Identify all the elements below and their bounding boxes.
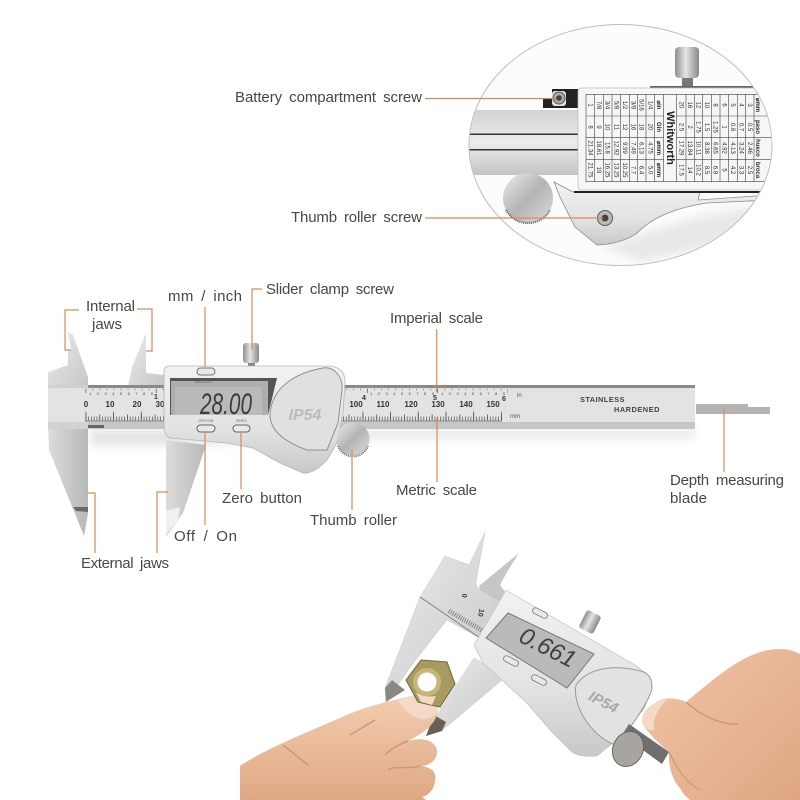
Whitworth thread table text: 7/8	[595, 101, 601, 110]
label: internal jaws: jaws	[91, 316, 122, 333]
Whitworth thread table text: Gin	[655, 122, 661, 132]
Whitworth thread table text: 20	[646, 124, 652, 131]
Whitworth thread table text: 10	[703, 102, 709, 109]
dark gap under plate	[574, 191, 770, 193]
metric numerals: 0	[84, 400, 89, 409]
beam scale on photo	[420, 593, 484, 640]
Whitworth thread table text: 14	[686, 167, 692, 174]
HARDENED text: HARDENED	[614, 405, 660, 414]
Whitworth thread table text: 10.2	[694, 164, 700, 176]
Whitworth thread table text: 11	[612, 124, 618, 131]
Whitworth thread table text: 2	[686, 125, 692, 129]
jaw tip	[385, 680, 405, 702]
Whitworth thread table text: 18.61	[595, 140, 601, 156]
fixed internal jaw	[48, 332, 88, 388]
Whitworth thread table text: 19	[595, 167, 601, 174]
STAINLESS text: STAINLESS	[580, 395, 625, 404]
Whitworth thread table text: 0.5	[746, 123, 752, 132]
Whitworth thread table text: 6.4	[638, 166, 644, 175]
metric numerals	[84, 400, 500, 409]
inset beam	[465, 110, 580, 175]
metric numerals: 110	[377, 400, 390, 409]
panel: inset close-up of battery and thumb roller screws	[465, 24, 775, 266]
fixed external jaw	[48, 422, 88, 536]
Whitworth thread table text: 18	[638, 124, 644, 131]
metric scale ticks	[85, 416, 502, 421]
Whitworth thread table text: 1.25	[712, 121, 718, 133]
Whitworth thread table text: 1.5	[703, 123, 709, 132]
teardrop IP54 badge	[270, 368, 342, 450]
Whitworth thread table text: 1	[720, 125, 726, 129]
Whitworth thread table text: ⌀in	[655, 101, 661, 110]
metric numerals: 10	[106, 400, 115, 409]
movable internal jaw	[128, 333, 166, 386]
Whitworth thread table text: 16	[686, 102, 692, 109]
Whitworth thread table text: 6.13	[638, 142, 644, 154]
leader: thumb roller screw	[425, 217, 603, 219]
photo clamp knob	[578, 609, 602, 635]
metric numerals: 100	[349, 400, 363, 409]
Whitworth thread table text: 1/4	[646, 101, 652, 110]
imperial inch numerals: 6	[502, 396, 506, 403]
Whitworth thread table text: 0.8	[729, 123, 735, 132]
panel: hands measuring a nut with the caliper	[240, 532, 800, 800]
Whitworth thread table text: 3/8	[629, 101, 635, 110]
Whitworth thread table text: 12.92	[612, 140, 618, 156]
Whitworth thread table text: Whitworth	[664, 111, 676, 165]
Whitworth thread table text: 13.25	[612, 162, 618, 178]
teardrop IP54 badge: IP54	[289, 407, 322, 424]
mm/inch button: MM/INCH	[194, 379, 212, 384]
inset black bracket	[543, 89, 578, 108]
Whitworth thread table text: 12	[694, 102, 700, 109]
label: thumb roller screw: Thumb roller screw	[291, 209, 422, 226]
photo buttons	[503, 607, 548, 686]
Whitworth thread table text: 5	[729, 103, 735, 107]
imperial inch numerals: 5	[433, 395, 437, 402]
label: off / on: Off / On	[174, 528, 237, 545]
Whitworth thread table text: 7.49	[629, 142, 635, 154]
Whitworth thread table text: 3/4	[604, 101, 610, 110]
Whitworth thread table text: 12	[621, 124, 627, 131]
Whitworth thread table text: 4	[738, 103, 744, 107]
Whitworth thread table text: 6.8	[712, 166, 718, 175]
metric numerals: 150	[486, 400, 500, 409]
caliper shadow	[90, 430, 695, 445]
Whitworth thread table text: 1.75	[694, 121, 700, 133]
label: thumb roller: Thumb roller	[310, 512, 397, 529]
Whitworth thread table text: 16.25	[604, 162, 610, 178]
off/on button: OFF/ON	[198, 418, 214, 423]
label: mm / inch: mm / inch	[168, 288, 242, 305]
Whitworth thread table text: 10.11	[694, 141, 700, 156]
unit marks	[510, 393, 522, 420]
Whitworth thread table text: 6.65	[712, 142, 718, 154]
Whitworth thread table text: 4.92	[720, 142, 726, 154]
Whitworth thread table text: 8.38	[703, 142, 709, 154]
inset thumb roller screw	[598, 210, 612, 226]
thumb roller	[336, 422, 370, 456]
imperial inch numerals: 4	[362, 395, 366, 402]
inset battery screw	[552, 91, 566, 106]
LCD reading: 28.00	[199, 388, 252, 421]
depth measuring blade	[696, 404, 770, 414]
Whitworth thread table text: 3.24	[738, 142, 744, 154]
label: depth measuring blade	[670, 472, 784, 507]
label: zero button: Zero button	[222, 490, 302, 507]
zero button	[233, 418, 250, 432]
inset clamp knob	[675, 47, 699, 89]
hex nut	[406, 660, 455, 707]
label: external jaws: External jaws	[81, 555, 169, 572]
unit marks: mm	[510, 414, 520, 420]
label: depth measuring blade: blade	[670, 490, 707, 507]
metric numerals: 30	[156, 400, 165, 409]
Whitworth thread table text: ⌀mm	[655, 163, 661, 177]
Whitworth thread table text: 8	[586, 125, 592, 129]
inset body shadow	[608, 206, 750, 262]
LCD screen	[171, 381, 268, 415]
metric numerals: 120	[404, 400, 418, 409]
fixed jaw head	[385, 532, 504, 702]
metric numerals: 140	[459, 400, 473, 409]
label: internal jaws	[86, 298, 135, 333]
label: imperial scale: Imperial scale	[390, 310, 483, 327]
Whitworth thread table text: 15.8	[604, 142, 610, 154]
Whitworth thread table text: 6	[720, 103, 726, 107]
movable upper jaw	[479, 553, 519, 604]
Whitworth thread table text: 16	[629, 124, 635, 131]
Whitworth thread table text: paso	[754, 120, 760, 134]
Whitworth thread table text: 1	[586, 103, 592, 107]
imperial scale tenths numerals: 1 2 3 4 5 6 7 8 9	[441, 391, 506, 396]
Whitworth reference plate	[578, 88, 775, 190]
beam	[48, 385, 695, 429]
photo body	[474, 590, 652, 756]
Whitworth thread table text: 3	[746, 103, 752, 107]
label: depth measuring blade: Depth measuring	[670, 472, 784, 489]
movable lower jaw	[426, 657, 506, 736]
photo beam end	[622, 724, 669, 764]
Whitworth thread table text: 5.0	[646, 166, 652, 175]
label: slider clamp screw: Slider clamp screw	[266, 281, 394, 298]
Whitworth thread table text: 0.7	[738, 123, 744, 132]
Whitworth thread table text: 9	[595, 125, 601, 129]
imperial scale tenths numerals: 1 2 3 4 5 6 7 8 9	[89, 391, 154, 396]
zero button: ZERO	[235, 418, 247, 423]
Whitworth thread table text: 5	[720, 168, 726, 172]
main caliper illustration	[48, 332, 770, 537]
imperial inch numerals	[154, 394, 506, 403]
Whitworth thread table text: 17.5	[677, 164, 683, 176]
photo LCD reading: 0.661	[515, 622, 580, 674]
Whitworth thread table text: 2.46	[746, 142, 752, 154]
imperial scale ticks	[86, 390, 508, 391]
metric numerals: 20	[133, 400, 142, 409]
leaders for main caliper	[65, 289, 724, 553]
metric numerals: 130	[431, 400, 445, 409]
Whitworth thread table text: 4.75	[646, 142, 652, 154]
Whitworth thread table text: 17.29	[677, 140, 683, 156]
Whitworth thread table text: hueco	[754, 139, 760, 157]
photo thumb roller	[607, 726, 649, 772]
Whitworth thread table text: 8	[712, 103, 718, 107]
slider body	[164, 366, 345, 473]
off/on button	[197, 418, 215, 432]
Whitworth thread table text: broca	[754, 162, 760, 179]
label: metric scale: Metric scale	[396, 482, 477, 499]
movable external jaw	[166, 440, 206, 537]
imperial inch numerals: 1	[154, 394, 158, 401]
leader: battery compartment screw	[425, 98, 556, 100]
Whitworth thread table text: 10.25	[621, 162, 627, 178]
Whitworth thread table text: ⌀mm	[754, 98, 760, 112]
beam scale on photo: 0	[460, 593, 467, 598]
Whitworth thread table text: 7.7	[629, 166, 635, 175]
Whitworth thread table text: 4.2	[729, 166, 735, 175]
Whitworth thread table text: 1/2	[621, 101, 627, 110]
Whitworth thread table text: 5/8	[612, 101, 618, 110]
Whitworth thread table text: 20	[677, 102, 683, 109]
Whitworth thread table text: 8.5	[703, 166, 709, 175]
Whitworth thread table text	[586, 98, 760, 179]
label: battery compartment screw: Battery compartment screw	[235, 89, 422, 106]
beam scale on photo: 10	[476, 608, 484, 617]
Whitworth thread table text: 2.5	[677, 123, 683, 132]
photo LCD	[486, 613, 594, 688]
Whitworth thread table text: 3.3	[738, 166, 744, 175]
imperial scale tenths numerals: 1 2 3 4 5 6 7 8 9	[370, 391, 435, 396]
imperial scale tenths numerals	[89, 391, 506, 396]
right hand	[642, 649, 800, 800]
Whitworth thread table text: ⌀mm	[655, 141, 661, 155]
Whitworth thread table text: 9.99	[621, 142, 627, 154]
LCD bezel	[170, 378, 277, 415]
Whitworth thread table text: 4.13	[729, 142, 735, 154]
unit marks: in	[517, 393, 522, 399]
left hand	[240, 695, 438, 800]
inset thumb wheel	[503, 173, 553, 223]
photo badge: IP54	[586, 688, 621, 717]
label: internal jaws: Internal	[86, 298, 135, 315]
Whitworth thread table text: 5/16	[638, 99, 644, 111]
inset background circle	[469, 24, 772, 266]
Whitworth thread table text: 2.5	[746, 166, 752, 175]
mm/inch button	[194, 368, 215, 384]
Whitworth thread table text: 10	[604, 124, 610, 131]
photo badge	[575, 668, 652, 745]
Whitworth thread table text: 13.84	[686, 140, 692, 156]
inset lower body	[554, 182, 770, 245]
Whitworth thread table text: 21.34	[586, 140, 592, 156]
Whitworth thread table text: 21.75	[586, 162, 592, 178]
slider clamp screw knob	[243, 343, 259, 367]
